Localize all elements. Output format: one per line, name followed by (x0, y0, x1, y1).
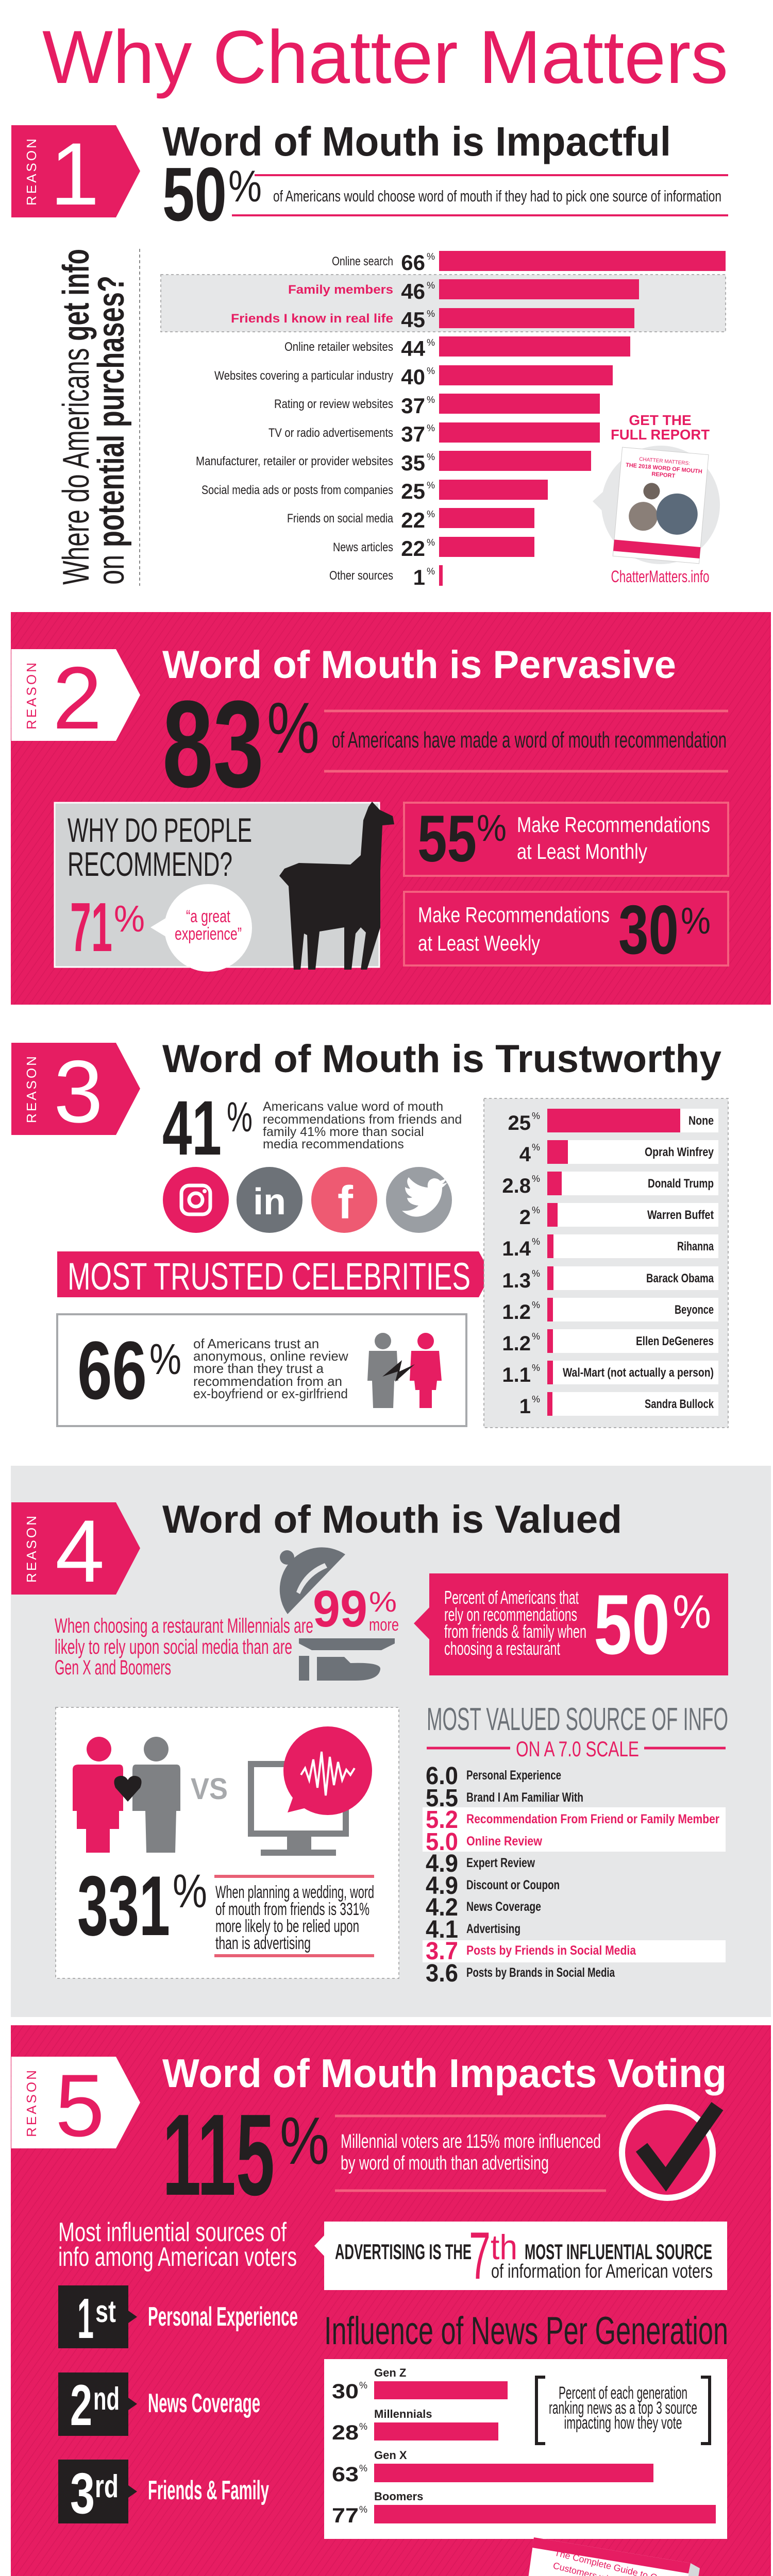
bar chart: info sources: News articles (333, 540, 393, 554)
bar chart: news influence by generation: % (359, 2380, 367, 2391)
stat 115% (162, 2090, 606, 2219)
badge: reason 2: 2 (53, 649, 102, 748)
bar chart: info sources: 37 (401, 394, 425, 418)
bar chart: info sources: Online search (332, 255, 393, 268)
badge: reason 5: REASON (24, 2068, 39, 2137)
chart: celebrity trust: Warren Buffet (647, 1208, 714, 1222)
icons: social media (163, 1167, 452, 1233)
list: most valued source of info: ON A 7.0 SCALE (516, 1737, 639, 1761)
icon: monitor with sound bubble (251, 1726, 372, 1856)
panel: 66% trust online reviews: of Americans trust an (193, 1336, 319, 1351)
bar chart: info sources: 35 (401, 451, 425, 475)
subheading: most influential sources: info among American voters (58, 2242, 297, 2272)
bar chart: info sources: 40 (401, 365, 425, 389)
speech bubble: a great experience (150, 884, 252, 972)
rank 1st: personal experience (58, 2285, 298, 2350)
callout: advertising is the 7th: 7 (469, 2218, 491, 2293)
rank 3rd: friends & family: Friends & Family (148, 2476, 269, 2505)
banner: most trusted celebrities: MOST TRUSTED CELEBRITIES (68, 1255, 470, 1298)
stat box: 55% monthly: 55 (417, 802, 477, 876)
list: most valued source of info: Advertising (466, 1922, 520, 1936)
chart: celebrity trust: Rihanna (677, 1240, 714, 1253)
list: most valued source of info: Posts by Brands in Social Media (466, 1965, 615, 1980)
stat 115%: by word of mouth than advertising (341, 2153, 549, 2174)
subheading: most influential sources (58, 2217, 297, 2272)
speech bubble: a great experience: experience” (175, 924, 242, 944)
bar chart: info sources: 66 (401, 250, 425, 275)
bar chart: info sources: % (427, 337, 435, 348)
bar chart: info sources: 45 (401, 308, 425, 332)
bar chart: news influence by generation: % (359, 2463, 367, 2473)
chart: celebrity trust: Sandra Bullock (645, 1397, 714, 1411)
chart: celebrity trust: % (532, 1300, 540, 1310)
stat 41%: media recommendations (263, 1137, 404, 1151)
list: most valued source of info: 4.1 (426, 1916, 458, 1943)
stat box: 55% monthly: % (477, 808, 507, 849)
bar chart: info sources: Online retailer websites (284, 340, 393, 354)
callout: get the full report: GET THE (629, 412, 692, 428)
callout: advertising is the 7th (314, 2218, 727, 2293)
speech bubble: a great experience: “a great (186, 907, 230, 926)
stat box: 30% weekly (404, 891, 728, 969)
chart: celebrity trust: Donald Trump (648, 1177, 714, 1191)
stat 115%: % (280, 2103, 329, 2178)
icons: social media: f (338, 1177, 354, 1229)
bracket note (536, 2377, 710, 2444)
stat box: 30% weekly: % (681, 901, 711, 942)
rank 1st: personal experience: Personal Experience (148, 2302, 298, 2332)
subheading: most influential sources: Most influential sources of (58, 2217, 287, 2247)
panel: 66% trust online reviews: ex-boyfriend or ex-girlfriend (193, 1386, 348, 1401)
list: most valued source of info (423, 1702, 728, 1987)
badge: reason 4 (11, 1502, 140, 1601)
chart: celebrity trust: 1.2 (502, 1301, 531, 1324)
chart: celebrity trust: % (532, 1111, 540, 1121)
bar chart: info sources: % (427, 280, 435, 291)
stat 331%: of mouth from friends is 331% (215, 1900, 369, 1919)
stat 115%: Millennial voters are 115% more influenced (341, 2131, 601, 2153)
badge: reason 2 (11, 649, 140, 748)
callout box: 50% rely on recommendations: choosing a restaurant (444, 1638, 560, 1659)
section 3: word of mouth is trustworthy (11, 1037, 728, 1428)
callout: get the full report: FULL REPORT (611, 427, 710, 443)
callout box: 50% rely on recommendations: Percent of Americans that (444, 1587, 579, 1608)
stat: millennials 99% more: When choosing a restaurant Millennials are (55, 1615, 313, 1637)
bar chart: info sources: % (427, 537, 435, 548)
heading 1: Word of Mouth is Impactful (162, 118, 671, 164)
stat box: 55% monthly: Make Recommendations (517, 812, 710, 837)
list: most valued source of info: 3.7 (426, 1938, 458, 1965)
bar chart: news influence by generation: Gen X (374, 2449, 407, 2462)
bar chart: info sources: Social media ads or posts from companies (201, 483, 393, 497)
bar chart: news influence by generation: Gen Z (374, 2366, 406, 2379)
stat 41%: recommendations from friends and (263, 1112, 462, 1127)
list: most valued source of info: Personal Experience (466, 1768, 561, 1783)
bar chart: news influence by generation: 30 (332, 2380, 359, 2403)
callout: get the full report (593, 412, 720, 586)
section 1: word of mouth is impactful (11, 118, 728, 589)
stat 331%: When planning a wedding, word (215, 1883, 374, 1902)
stat 41%: Americans value word of mouth (263, 1099, 443, 1114)
stat: millennials 99% more: Gen X and Boomers (55, 1656, 171, 1679)
bar chart: news influence by generation: % (359, 2421, 367, 2432)
bar chart: info sources: 22 (401, 536, 425, 561)
chart: celebrity trust: Barack Obama (646, 1272, 714, 1285)
bar chart: info sources: 22 (401, 508, 425, 532)
stat 50% (162, 152, 728, 237)
bar chart: info sources: 25 (401, 479, 425, 503)
stat 41% (162, 1084, 462, 1171)
bar chart: news influence by generation: 63 (332, 2463, 359, 2486)
vertical question text (56, 249, 140, 586)
chart: celebrity trust: None (688, 1114, 714, 1128)
panel: 66% trust online reviews (57, 1314, 466, 1426)
panel: 66% trust online reviews: 66 (77, 1324, 147, 1416)
panel: why do people recommend: WHY DO PEOPLE (68, 811, 252, 849)
callout: get the full report: REPORT (651, 471, 676, 479)
bar chart: info sources: % (427, 251, 435, 262)
bar chart: info sources (196, 250, 726, 589)
heading 3: Word of Mouth is Trustworthy (162, 1037, 721, 1081)
callout box: 50% rely on recommendations: 50 (594, 1577, 670, 1672)
rank 1st: personal experience: st (95, 2294, 116, 2329)
list: most valued source of info: News Coverage (466, 1900, 541, 1914)
rank 1st: personal experience: 1 (77, 2287, 94, 2350)
bar chart: info sources: TV or radio advertisements (268, 426, 393, 440)
stat 331%: 331 (77, 1858, 170, 1953)
chart: celebrity trust: 1 (519, 1395, 531, 1418)
stat 115%: 115 (162, 2090, 275, 2219)
bar chart: info sources: % (427, 309, 435, 319)
list: most valued source of info: 6.0 (426, 1762, 458, 1790)
callout box: 50% rely on recommendations: % (673, 1586, 711, 1638)
bracket note: Percent of each generation (559, 2383, 687, 2403)
icon: serving cloche (280, 1547, 395, 1681)
vs label: VS (191, 1772, 228, 1806)
bar chart: info sources: Websites covering a particular industry (214, 369, 393, 383)
list: most valued source of info: Expert Review (466, 1856, 535, 1870)
bar chart: news influence by generation: 28 (332, 2421, 359, 2444)
panel: 66% trust online reviews: more than they trust a (193, 1361, 324, 1376)
chart: celebrity trust: 2.8 (502, 1175, 531, 1197)
bar chart: info sources: Friends I know in real life (231, 312, 393, 326)
chart: celebrity trust: Oprah Winfrey (645, 1145, 714, 1159)
vertical question text: Where do Americans get info (56, 249, 97, 585)
bar chart: news influence by generation (324, 2359, 727, 2539)
stat: millennials 99% more (55, 1580, 399, 1679)
badge: reason 4: 4 (55, 1502, 105, 1601)
chart: celebrity trust (484, 1098, 728, 1428)
list: most valued source of info: Posts by Friends in Social Media (466, 1943, 636, 1958)
chart: celebrity trust: Wal-Mart (not actually a person) (563, 1366, 714, 1380)
bar chart: info sources: % (427, 509, 435, 519)
list: most valued source of info: 5.0 (426, 1828, 458, 1856)
section 2: word of mouth is pervasive (11, 612, 771, 1005)
callout: get the full report: CHATTER MATTERS: (639, 456, 690, 467)
rank 2nd: news coverage (58, 2372, 260, 2437)
callout: advertising is the 7th: th (491, 2228, 517, 2267)
chart: celebrity trust: % (532, 1363, 540, 1373)
chart: celebrity trust: % (532, 1174, 540, 1184)
list: most valued source of info: 5.5 (426, 1785, 458, 1812)
highlight box: family & friends (161, 275, 726, 332)
rank 3rd: friends & family: rd (95, 2469, 119, 2504)
panel: 66% trust online reviews: % (149, 1335, 181, 1383)
badge: reason 4: REASON (24, 1514, 39, 1583)
badge: reason 1: REASON (24, 137, 39, 206)
bar chart: info sources: Other sources (329, 569, 393, 583)
stat box: 30% weekly: 30 (618, 891, 679, 969)
stat box: 55% monthly: at Least Monthly (517, 839, 647, 863)
rank 2nd: news coverage: nd (93, 2381, 120, 2417)
callout box: 50% rely on recommendations (414, 1573, 728, 1675)
bar chart: info sources: 37 (401, 422, 425, 446)
list: most valued source of info: Online Review (466, 1834, 542, 1849)
stat 331%: than is advertising (215, 1934, 311, 1953)
list: most valued source of info: 4.9 (426, 1850, 458, 1877)
bar chart: info sources: 46 (401, 279, 425, 303)
callout box: 50% rely on recommendations: from friends & family when (444, 1621, 586, 1642)
callout: get the full report: THE 2018 WORD OF MOUTH (626, 462, 702, 475)
chart: celebrity trust: % (532, 1142, 540, 1153)
chart: celebrity trust: % (532, 1205, 540, 1215)
icon: broken-up couple (367, 1333, 442, 1408)
chart: celebrity trust: Beyonce (675, 1303, 714, 1317)
badge: reason 1 (11, 125, 140, 224)
stat: millennials 99% more: more (369, 1615, 399, 1635)
bar chart: news influence by generation: Millennials (374, 2408, 432, 2420)
panel: why do people recommend: RECOMMEND? (68, 845, 232, 883)
chart: celebrity trust: 1.4 (502, 1238, 531, 1260)
list: most valued source of info: Brand I Am Familiar With (466, 1790, 583, 1805)
bar chart: info sources: Rating or review websites (274, 397, 393, 411)
bar chart: news influence by generation: 77 (332, 2504, 359, 2527)
chart: celebrity trust: Ellen DeGeneres (636, 1334, 714, 1348)
icons: social media: in (253, 1181, 286, 1223)
bar chart: news influence by generation: % (359, 2504, 367, 2515)
heading 2: Word of Mouth is Pervasive (162, 643, 676, 687)
stat: millennials 99% more: % (369, 1585, 397, 1618)
chart: celebrity trust: 2 (519, 1206, 531, 1229)
callout: advertising is the 7th: ADVERTISING IS THE (335, 2240, 472, 2264)
badge: reason 3: 3 (54, 1042, 103, 1141)
chart: celebrity trust: % (532, 1236, 540, 1247)
bar chart: info sources: % (427, 423, 435, 433)
list: most valued source of info: Discount or Coupon (466, 1878, 560, 1892)
list: most valued source of info: 3.6 (426, 1960, 458, 1987)
heading 5: Word of Mouth Impacts Voting (162, 2050, 727, 2096)
badge: reason 3: REASON (24, 1054, 39, 1123)
bar chart: info sources: % (427, 480, 435, 490)
bar chart: info sources: Manufacturer, retailer or provider websites (196, 454, 393, 468)
stat box: 55% monthly (404, 802, 728, 876)
chart: celebrity trust: % (532, 1394, 540, 1404)
vertical question text: on potential purchases? (91, 276, 132, 585)
bar chart: info sources: % (427, 395, 435, 405)
icon: couple with heart (73, 1737, 180, 1853)
chart: celebrity trust: 25 (508, 1112, 531, 1134)
badge: reason 5 (11, 2056, 140, 2155)
section 4: word of mouth is valued (11, 1466, 771, 2017)
stat box: 30% weekly: at Least Weekly (418, 931, 540, 955)
stat 50%: % (228, 162, 262, 211)
book cover (502, 2537, 700, 2576)
chart: celebrity trust: 1.1 (502, 1364, 531, 1386)
chart: celebrity trust: % (532, 1268, 540, 1279)
bar chart: info sources: 1 (413, 565, 425, 589)
icon: llama silhouette (279, 802, 394, 970)
bracket note: impacting how they vote (564, 2413, 682, 2433)
stat 41%: family 41% more than social (263, 1125, 424, 1139)
stat 331%: % (173, 1865, 207, 1918)
bar chart: info sources: % (427, 452, 435, 462)
rank 3rd: friends & family (58, 2460, 269, 2526)
stat: millennials 99% more: likely to rely upon social media than are (55, 1636, 292, 1658)
chart: celebrity trust: 4 (519, 1143, 531, 1166)
panel: why do people recommend: % (114, 899, 145, 940)
book promo: talk triggers (56, 2537, 704, 2576)
section 5: word of mouth impacts voting (11, 2025, 771, 2576)
panel: why do people recommend (55, 803, 379, 972)
stat 50%: 50 (162, 152, 227, 237)
badge: reason 5: 5 (55, 2056, 105, 2155)
chart: celebrity trust: 1.2 (502, 1332, 531, 1355)
bar chart: info sources: Family members (288, 283, 393, 297)
stat: millennials 99% more: 99 (313, 1580, 367, 1638)
chart: celebrity trust: 1.3 (502, 1269, 531, 1292)
heading 4: Word of Mouth is Valued (162, 1498, 622, 1541)
callout box: 50% rely on recommendations: rely on recommendations (444, 1604, 577, 1625)
list: most valued source of info: Recommendation From Friend or Family Member (466, 1812, 719, 1826)
stat 41%: 41 (162, 1084, 222, 1171)
bar chart: info sources: 44 (401, 336, 426, 361)
badge: reason 2: REASON (24, 660, 39, 730)
chart: celebrity trust: % (532, 1331, 540, 1342)
callout: get the full report: ChatterMatters.info (611, 567, 709, 586)
icon: checkmark circle (622, 2106, 717, 2198)
title: Why Chatter Matters (42, 15, 728, 99)
rank 3rd: friends & family: 3 (70, 2461, 95, 2526)
list: most valued source of info: 5.2 (426, 1806, 458, 1834)
panel: why do people recommend: 71 (70, 888, 112, 966)
bar chart: info sources: Friends on social media (287, 512, 394, 526)
stat 331% (77, 1858, 374, 1956)
stat 83%: % (267, 687, 320, 768)
stat 83% (162, 675, 728, 813)
list: most valued source of info: 4.9 (426, 1872, 458, 1900)
bar chart: info sources: % (427, 566, 435, 577)
stat box: 30% weekly: Make Recommendations (418, 903, 610, 927)
panel: 66% trust online reviews: anonymous, online review (193, 1348, 348, 1364)
badge: reason 1: 1 (50, 125, 99, 224)
list: most valued source of info: 4.2 (426, 1894, 458, 1921)
rank 2nd: news coverage: News Coverage (148, 2388, 260, 2418)
stat 41%: % (227, 1094, 253, 1141)
bar chart: news influence by generation: Boomers (374, 2490, 423, 2503)
bar chart: info sources: % (427, 366, 435, 376)
stat 83%: 83 (162, 675, 264, 813)
panel: wedding word of mouth vs advertising (56, 1707, 399, 1978)
panel: 66% trust online reviews: recommendation from an (193, 1374, 342, 1389)
badge: reason 3 (11, 1042, 140, 1141)
stat 331%: more likely to be relied upon (215, 1917, 359, 1936)
rank 2nd: news coverage: 2 (70, 2373, 92, 2437)
